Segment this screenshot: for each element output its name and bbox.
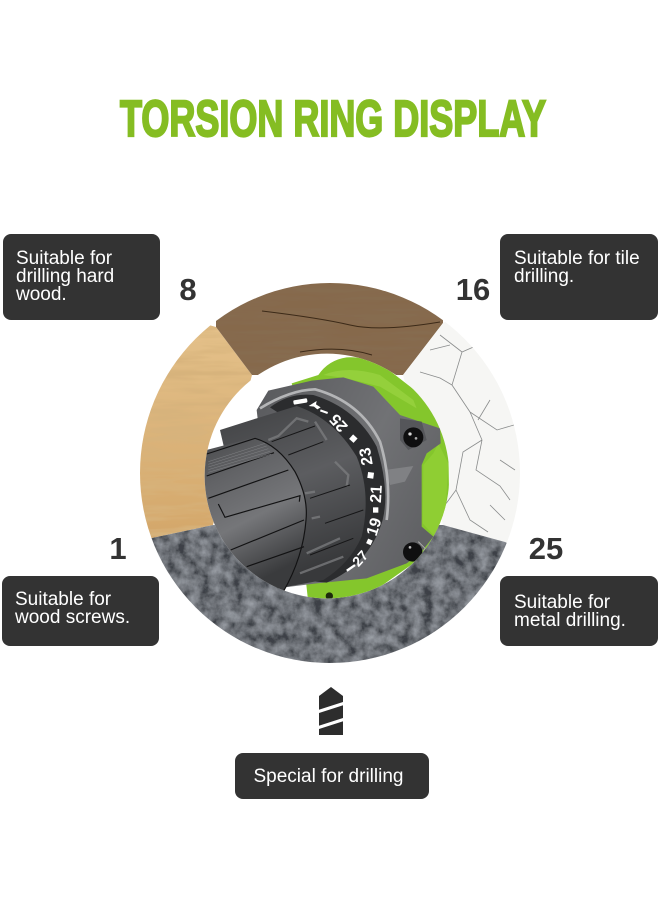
grey body <box>257 377 441 588</box>
dial numbers: 27 <box>349 547 371 569</box>
callout: hard wood <box>3 234 160 320</box>
callout: metal: Suitable for <box>514 592 610 613</box>
segment: grey felt <box>152 525 507 663</box>
callout: hard wood: Suitable for <box>16 248 112 269</box>
number 1: 1 <box>109 531 127 566</box>
white hole <box>205 354 449 598</box>
small hole in green shell <box>326 592 333 600</box>
callout: wood screws <box>2 576 159 646</box>
callout: tile: Suitable for tile <box>514 248 640 269</box>
callout: tile: drilling. <box>514 266 574 287</box>
callout: hard wood: drilling hard <box>16 266 114 287</box>
dial numbers: 23 <box>357 446 377 467</box>
dial numbers: 25 <box>327 410 351 435</box>
side green grip <box>423 443 448 535</box>
screw: lower <box>403 542 425 562</box>
callout: special for drilling <box>235 753 429 799</box>
knurled patch <box>208 443 271 472</box>
segment: cracked marble <box>403 322 520 542</box>
front chuck <box>200 437 306 592</box>
dial numbers <box>329 414 382 568</box>
segment: dark wood <box>216 283 443 375</box>
callout: metal: metal drilling. <box>514 610 626 631</box>
mid collar <box>220 406 366 589</box>
collar ribs <box>268 418 348 573</box>
dial dots <box>293 398 378 572</box>
chrome ring <box>260 389 388 520</box>
dial arrow <box>309 401 328 414</box>
drill head <box>200 354 449 603</box>
callout: wood screws: Suitable for <box>15 589 111 610</box>
number 16: 16 <box>456 272 490 307</box>
callout: wood screws: wood screws. <box>15 607 130 628</box>
green shell <box>292 357 449 603</box>
callout: metal <box>500 576 658 646</box>
icon: drill bit <box>317 687 345 735</box>
segment: light wood <box>140 326 252 538</box>
callout: hard wood: wood. <box>16 284 67 305</box>
screw: upper <box>400 418 427 450</box>
dial band <box>270 395 385 583</box>
callout: special for drilling: Special for drilling <box>254 766 403 787</box>
number 25: 25 <box>529 531 563 566</box>
dial numbers: 21 <box>368 485 386 503</box>
material ring <box>140 283 520 663</box>
main graphic: title, material ring, drill, bit icon <box>120 99 547 735</box>
callout: tile <box>500 234 658 320</box>
chuck grooves <box>207 438 306 592</box>
number 8: 8 <box>179 272 197 307</box>
dial numbers: 19 <box>364 516 386 538</box>
